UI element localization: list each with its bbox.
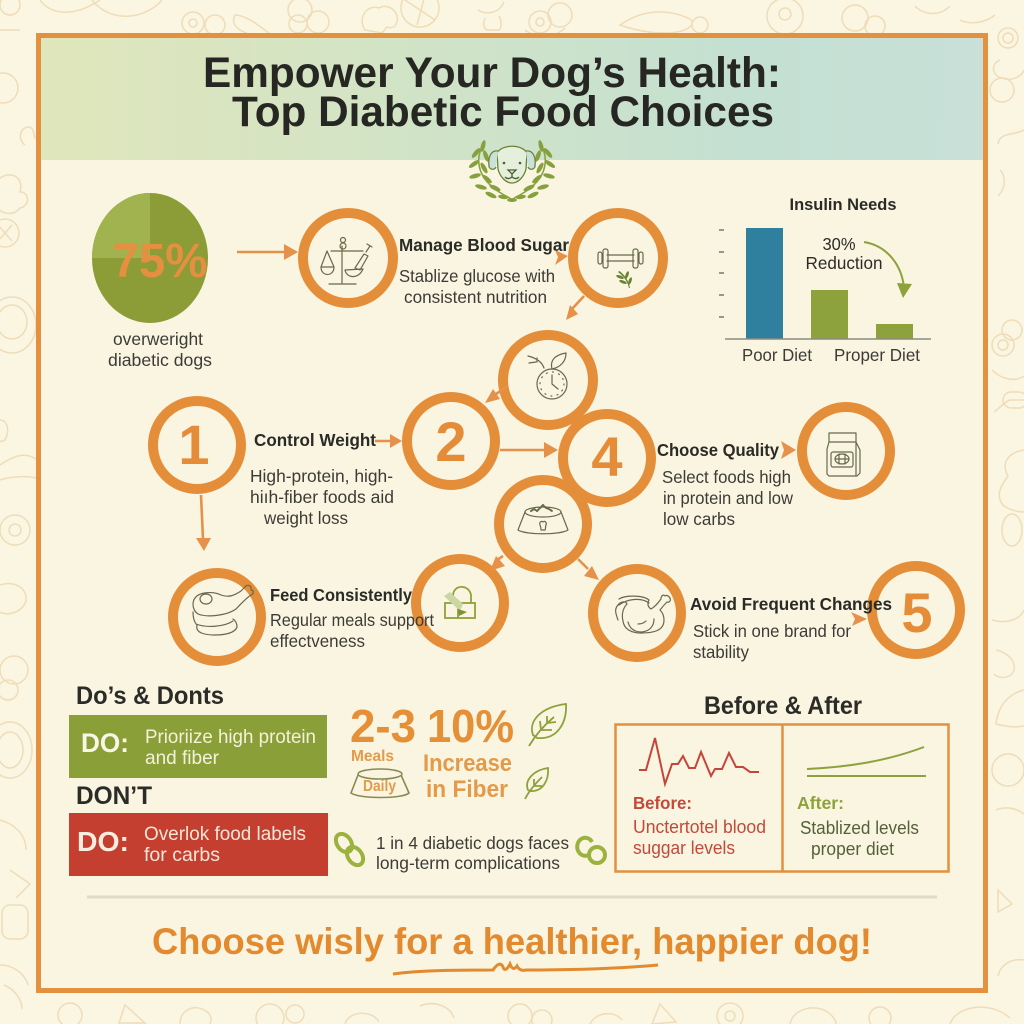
icon: chain left [333,831,366,868]
y axis ticks [719,230,724,317]
node: 5: 5 [901,581,933,644]
pie caption: overweright [113,329,203,349]
stat: 2-3 meals daily: 2-3 [350,700,416,752]
do box: Prioriize high protein [145,726,316,748]
chart: insulin needs [719,196,931,365]
do box [69,715,327,778]
node: 2 [407,397,495,485]
title: Empower Your Dog’s Health: [203,50,781,97]
text: choose quality: in protein and low [663,488,793,508]
node: meat [173,573,261,661]
reduction callout [806,234,912,298]
icon: large leaf [529,704,566,746]
axis labels: Poor Diet [742,345,812,365]
text: choose quality: low carbs [663,509,735,529]
text: control weight: High-protein, high- [250,466,393,486]
before and after table [616,724,948,872]
node: 5 [872,566,960,654]
chart: after stable line [807,747,926,776]
text: complications [376,833,569,873]
pie caption: diabetic dogs [108,350,212,370]
node: 2: 2 [435,410,467,473]
text: feed consistently [270,585,434,651]
text: complications: 1 in 4 diabetic dogs faces [376,833,569,853]
arrow: 2 to 4 [500,442,558,458]
text: avoid frequent changes: Stick in one brand for [693,621,851,641]
arrow: bowl to lock [490,556,505,571]
icon: small leaf [525,768,548,799]
text: avoid frequent changes [690,594,892,662]
icon: bowl [351,769,409,798]
arrow: to barbell [555,250,568,265]
node: scale and syringe [303,213,393,303]
node: clock and leaf [503,335,593,425]
node: 4 [563,414,651,502]
axis labels: Proper Diet [834,345,920,365]
node: lock and carrot [416,559,504,647]
text: avoid frequent changes: Avoid Frequent Changes [690,594,892,614]
heading: do's and donts: Do’s & Donts [76,682,224,710]
text: manage blood sugar [399,235,569,307]
text: control weight: weight loss [263,508,348,528]
pie chart: 75%: 75% [112,235,208,288]
text: avoid frequent changes: stability [693,642,749,662]
don't box: for carbs [144,844,220,866]
reduction callout: 30% [822,234,856,254]
text: before: suggar levels [633,838,735,858]
chart title: Insulin Needs [790,196,896,214]
header band [41,38,983,160]
closing tagline: Choose wisly for a healthier, happier dog! [152,921,872,962]
text: complications: long-term complications [376,853,560,873]
node: 4: 4 [591,425,623,488]
text: feed consistently: Regular meals support [270,610,434,630]
text: control weight: hiıh-fiber foods aid [250,487,394,507]
text: control weight [250,430,394,528]
arrow: control weight to 2 [375,434,402,448]
stat: 10% increase in fiber: 10% [427,700,514,752]
text: after: After: [797,793,844,813]
stat: 2-3 meals daily [350,700,416,798]
node: 1 [153,401,241,489]
stat: 10% increase in fiber [423,700,514,803]
chart: before glucose line [639,738,759,784]
icon: chain right [577,838,605,863]
don't box: DO: [77,826,129,857]
arrow: changes to 5 [851,612,867,626]
text: choose quality: Choose Quality [657,440,779,460]
node: barbell and herb [573,213,663,303]
axis labels [742,345,920,365]
text: after: proper diet [811,839,894,859]
icon: dog head with laurel wreath [468,140,556,202]
text: control weight: Control Weight [254,430,376,450]
pie chart: 75% [92,193,208,323]
axis line [725,338,931,340]
arrow: choose quality to bag [781,441,796,459]
text: after: Stablized levels [800,818,919,838]
title: Top Diabetic Food Choices [232,89,774,136]
text: choose quality [657,440,793,529]
stat: 10% increase in fiber: in Fiber [426,776,508,803]
text: manage blood sugar: Stablize glucose with [399,266,555,286]
stat: 2-3 meals daily: Daily [363,778,396,795]
stat: 2-3 meals daily: Meals [351,748,394,765]
pie caption [108,329,212,370]
don't box [69,813,328,876]
heading: don't: DON’T [76,782,152,810]
don't box: Overlok food labels [144,823,306,845]
text: before [633,793,766,858]
tagline squiggle underline [393,964,658,974]
text: choose quality: Select foods high [662,467,791,487]
arrow: clock to 2 [485,386,508,403]
do box: and fiber [145,747,219,769]
reduction callout: Reduction [806,253,882,273]
text: feed consistently: effectveness [270,631,365,651]
arrow: pie to step [237,244,298,260]
text: before: Before: [633,793,692,813]
bars [746,228,913,339]
stat: 10% increase in fiber: Increase [423,750,512,777]
arrow: 1 to feed consistently [196,495,211,551]
text: feed consistently: Feed Consistently [270,585,412,605]
node: chicken [593,569,681,657]
divider [87,896,937,898]
node: 1: 1 [178,413,210,476]
arrow: barbell to clock [566,296,584,320]
text: after [797,793,919,859]
heading: before and after: Before & After [704,692,862,720]
node: bowl [499,480,587,568]
text: before: Unctertotel blood [633,817,766,837]
do box: DO: [81,728,129,758]
text: manage blood sugar: consistent nutrition [404,287,547,307]
arrow: bowl to chicken [578,559,599,580]
text: manage blood sugar: Manage Blood Sugar [399,235,569,255]
title [203,50,781,136]
node: food bag [802,407,890,495]
